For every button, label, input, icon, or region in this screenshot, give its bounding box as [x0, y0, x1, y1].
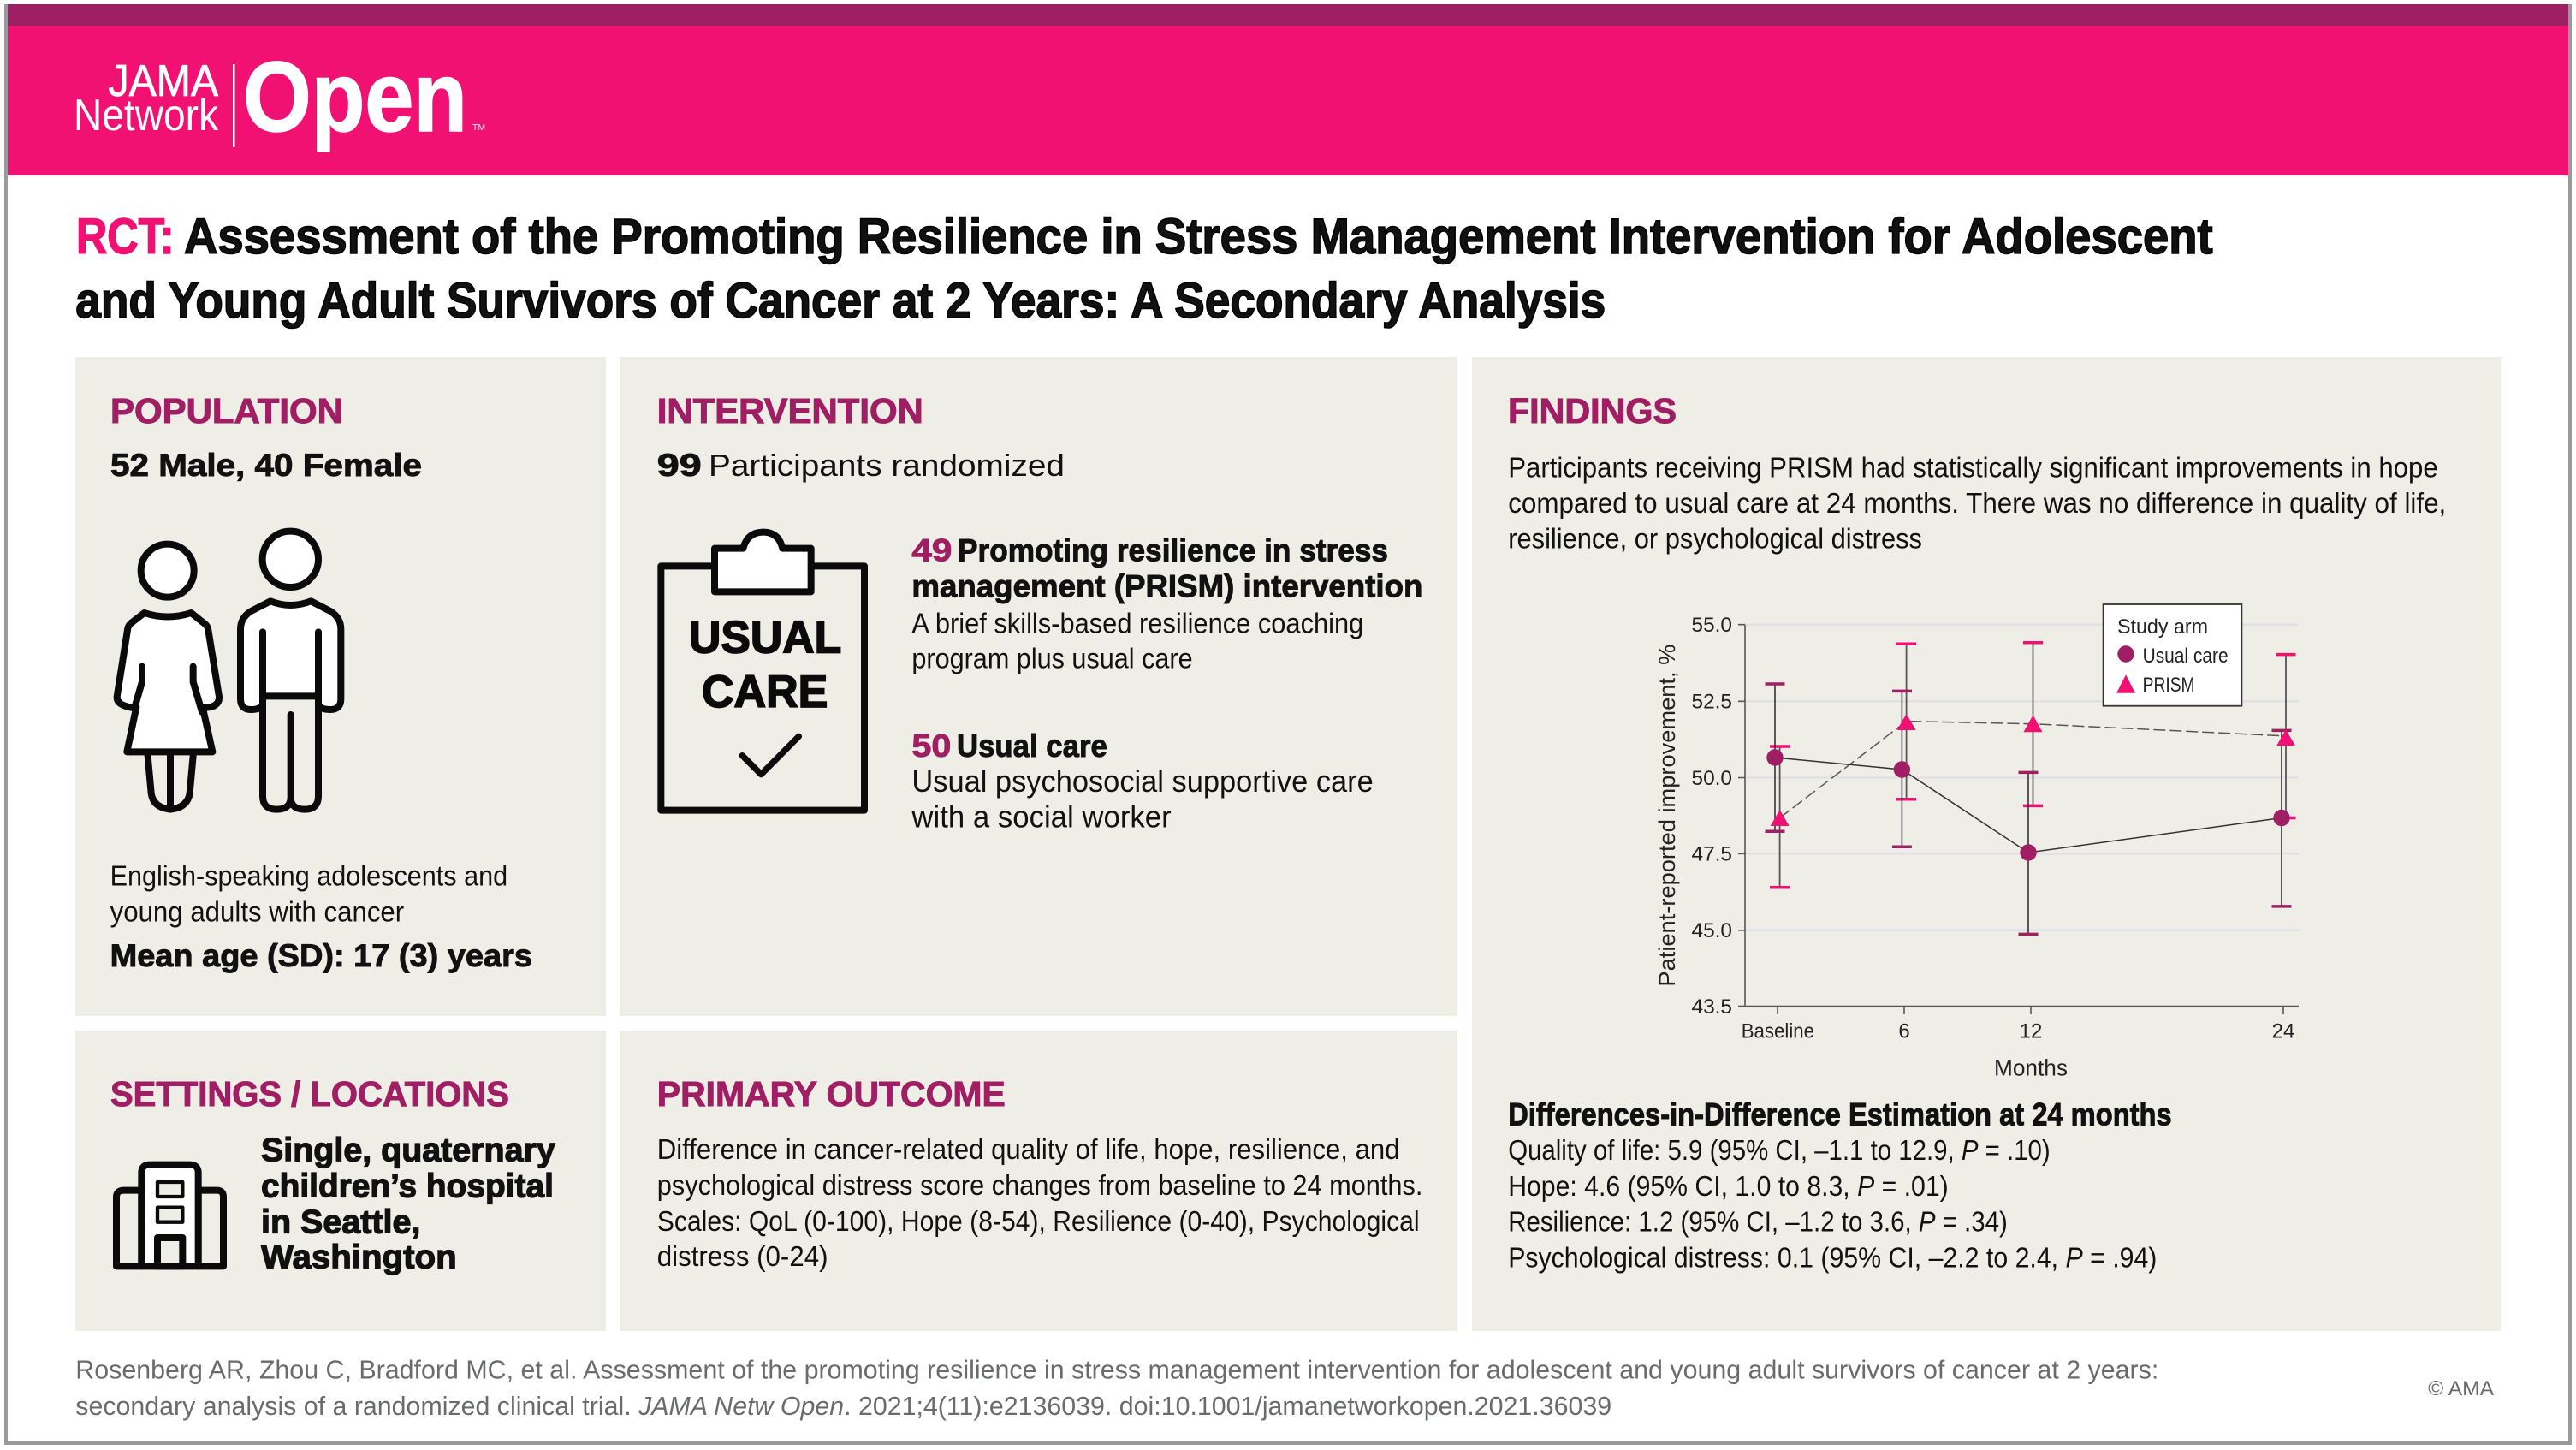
title: Assessment of the Promoting Resilience in Stress Management Intervention for Adolescent [184, 209, 2213, 264]
panel: settings and locations [75, 1031, 606, 1331]
panel: primary outcome [620, 1031, 1457, 1331]
title [75, 209, 2213, 329]
x-axis title: Months [1994, 1055, 2068, 1081]
citation: secondary analysis of a randomized clinical trial. JAMA Netw Open. 2021;4(11):e2136039. doi:10.1001/jamanetworkopen.2021.36039 [75, 1391, 1611, 1421]
markers: PRISM [1771, 714, 2295, 826]
findings summary: resilience, or psychological distress [1508, 523, 1922, 555]
outcome description: psychological distress score changes from baseline to 24 months. [657, 1169, 1422, 1201]
participants randomized: 99 [657, 448, 702, 483]
citation [75, 1355, 2158, 1421]
setting description: children’s hospital [261, 1168, 554, 1205]
findings summary: Participants receiving PRISM had statistically significant improvements in hope [1508, 451, 2438, 483]
findings summary: compared to usual care at 24 months. There was no difference in quality of life, [1508, 487, 2446, 519]
heading: primary outcome: PRIMARY OUTCOME [657, 1074, 1006, 1114]
outcome description: Scales: QoL (0-100), Hope (8-54), Resilience (0-40), Psychological [657, 1205, 1420, 1237]
differences-in-difference estimates: Psychological distress: 0.1 (95% CI, –2.2 to 2.4, P = .94) [1508, 1241, 2157, 1274]
line: usual care [1775, 758, 2282, 853]
line: PRISM [1780, 722, 2286, 818]
error bars: usual care [1765, 684, 2292, 934]
y-axis labels [1691, 614, 1732, 1019]
panel: findings [1472, 357, 2501, 1331]
differences-in-difference estimates: Resilience: 1.2 (95% CI, –1.2 to 3.6, P = .34) [1508, 1205, 2008, 1238]
setting description [261, 1132, 555, 1275]
mean age: Mean age (SD): 17 (3) years [110, 938, 532, 973]
legend: PRISM [2143, 674, 2195, 697]
title: RCT: [76, 209, 175, 264]
y-axis title: Patient-reported improvement, % [1654, 645, 1680, 987]
logo: JAMA Network Open: Open [243, 41, 467, 152]
legend: Usual care [2143, 645, 2229, 668]
differences-in-difference estimates: Quality of life: 5.9 (95% CI, –1.1 to 12.9, P = .10) [1508, 1134, 2051, 1166]
differences-in-difference estimates: Hope: 4.6 (95% CI, 1.0 to 8.3, P = .01) [1508, 1170, 1949, 1202]
arm: PRISM intervention: program plus usual care [911, 643, 1193, 674]
y-axis labels: 43.5 [1691, 995, 1732, 1019]
line chart: patient-reported improvement [1654, 604, 2299, 1081]
heading: findings: FINDINGS [1508, 391, 1677, 431]
heading: intervention: INTERVENTION [657, 391, 923, 431]
arm: usual care: Usual psychosocial supportive care [911, 764, 1374, 799]
participants randomized: Participants randomized [709, 448, 1065, 483]
arm: PRISM intervention [911, 533, 1422, 674]
differences-in-difference estimates [1508, 1097, 2172, 1274]
outcome description: distress (0-24) [657, 1240, 828, 1272]
logo: JAMA Network Open [74, 41, 485, 152]
differences-in-difference estimates: Differences-in-Difference Estimation at 24 months [1508, 1097, 2172, 1132]
arm: usual care [911, 728, 1374, 835]
arm: PRISM intervention: management (PRISM) intervention [911, 569, 1422, 604]
outcome description [657, 1133, 1422, 1272]
panel: population [75, 357, 606, 1016]
title: and Young Adult Survivors of Cancer at 2 Years: A Secondary Analysis [75, 273, 1606, 329]
arm: usual care: 50 [911, 728, 951, 764]
setting description: in Seattle, [261, 1203, 420, 1241]
header band [8, 4, 2568, 175]
y-axis labels: 52.5 [1691, 691, 1732, 714]
legend: Study arm [2117, 615, 2208, 639]
findings summary [1508, 451, 2446, 555]
y-axis labels: 55.0 [1691, 614, 1732, 637]
arm: PRISM intervention: A brief skills-based resilience coaching [911, 607, 1363, 639]
y-axis labels: 50.0 [1691, 767, 1732, 790]
x-axis labels: 12 [2020, 1020, 2042, 1043]
markers: usual care [1766, 749, 2290, 861]
x-axis labels [1742, 1020, 2294, 1043]
logo: JAMA Network Open: Network [74, 91, 219, 140]
icon: usual care clipboard [661, 532, 864, 811]
x-axis labels: 24 [2272, 1020, 2294, 1043]
heading: population: POPULATION [110, 391, 343, 431]
outcome description: Difference in cancer-related quality of life, hope, resilience, and [657, 1133, 1400, 1165]
icon: usual care clipboard: CARE [702, 667, 828, 717]
arm: usual care: Usual care [957, 728, 1107, 764]
icon: hospital building [116, 1165, 223, 1266]
icon: usual care clipboard: USUAL [689, 612, 841, 663]
panel: intervention [620, 357, 1457, 1016]
error bars: PRISM [1770, 643, 2295, 888]
population description: English-speaking adolescents and [110, 860, 507, 892]
arm: PRISM intervention: 49 [911, 533, 952, 568]
setting description: Single, quaternary [261, 1132, 555, 1169]
y-axis labels: 45.0 [1691, 919, 1732, 942]
x-axis labels: Baseline [1742, 1020, 1814, 1043]
logo: JAMA Network Open: JAMA [108, 56, 218, 106]
setting description: Washington [261, 1239, 457, 1275]
arm: usual care: with a social worker [911, 799, 1172, 835]
heading: settings: SETTINGS / LOCATIONS [110, 1074, 509, 1114]
icon: woman and man [117, 532, 341, 810]
legend [2104, 604, 2241, 706]
x-axis labels: 6 [1898, 1020, 1910, 1043]
logo: JAMA Network Open: TM [472, 123, 485, 133]
population count: 52 Male, 40 Female [110, 448, 422, 483]
y-axis labels: 47.5 [1691, 843, 1732, 866]
panel: population: young adults with cancer [110, 896, 404, 928]
citation: Rosenberg AR, Zhou C, Bradford MC, et al. Assessment of the promoting resilience in stress management intervention for adolescent and young adult survivors of cancer at 2 years: [75, 1355, 2158, 1385]
copyright: © AMA [2428, 1377, 2494, 1400]
arm: PRISM intervention: Promoting resilience in stress [958, 533, 1388, 568]
